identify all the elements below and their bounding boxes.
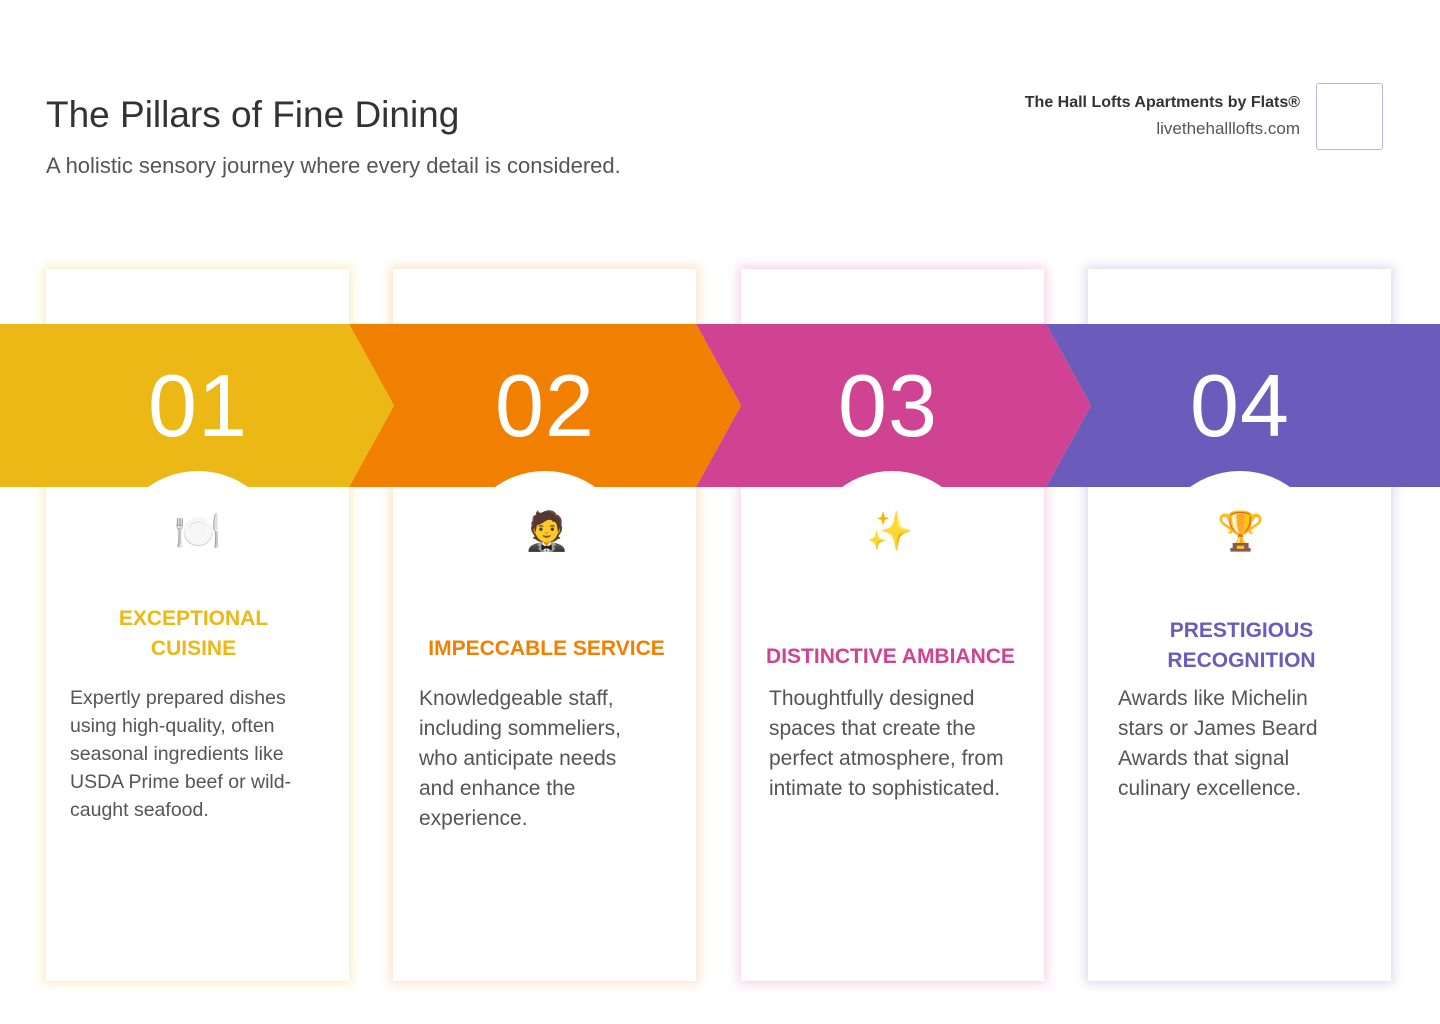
text: 03: [838, 356, 938, 455]
numbers: 01: [148, 356, 248, 455]
card 4 heading: [1167, 619, 1316, 672]
card 3 heading: DISTINCTIVE AMBIANCE: [766, 645, 1015, 668]
card 3 text: Thoughtfully designed spaces that create the perfect atmosphere, from intimate to sophisticated.: [769, 687, 1004, 800]
card 1 text: Expertly prepared dishes using high-quality, often seasonal ingredients like USDA Prime beef or wild-caught seafood.: [70, 687, 291, 821]
card 4 text: Awards like Michelin stars or James Beard Awards that signal culinary excellence.: [1118, 687, 1318, 800]
logo box: [1316, 83, 1383, 150]
card 2 text: Knowledgeable staff, including sommeliers, who anticipate needs and enhance the experience.: [419, 687, 621, 830]
circles: [112, 471, 284, 643]
card 2 heading: IMPECCABLE SERVICE: [428, 637, 665, 660]
card 4: [1088, 269, 1391, 981]
text: 04: [1190, 356, 1290, 455]
card 1: [46, 269, 349, 981]
card 1 heading: CUISINE: [151, 637, 236, 660]
card 1 heading: EXCEPTIONAL: [119, 607, 268, 630]
arrow band: [0, 324, 1440, 487]
brand: The Hall Lofts Apartments by Flats®: [1025, 94, 1300, 111]
card 2: [393, 269, 696, 981]
text: ✨: [866, 511, 914, 553]
brand: livethehalllofts.com: [1156, 119, 1300, 138]
icons: 🍽️: [174, 511, 222, 553]
title: The Pillars of Fine Dining: [46, 94, 459, 135]
text: 02: [495, 356, 595, 455]
card 4 heading: PRESTIGIOUS: [1170, 619, 1313, 642]
card 4 heading: RECOGNITION: [1167, 649, 1316, 672]
subtitle: A holistic sensory journey where every detail is considered.: [46, 153, 621, 178]
card 1 heading: [119, 607, 268, 660]
brand: [1024, 94, 1300, 138]
text: 🤵: [523, 511, 571, 553]
card 3: [741, 269, 1044, 981]
text: 🏆: [1217, 511, 1265, 553]
